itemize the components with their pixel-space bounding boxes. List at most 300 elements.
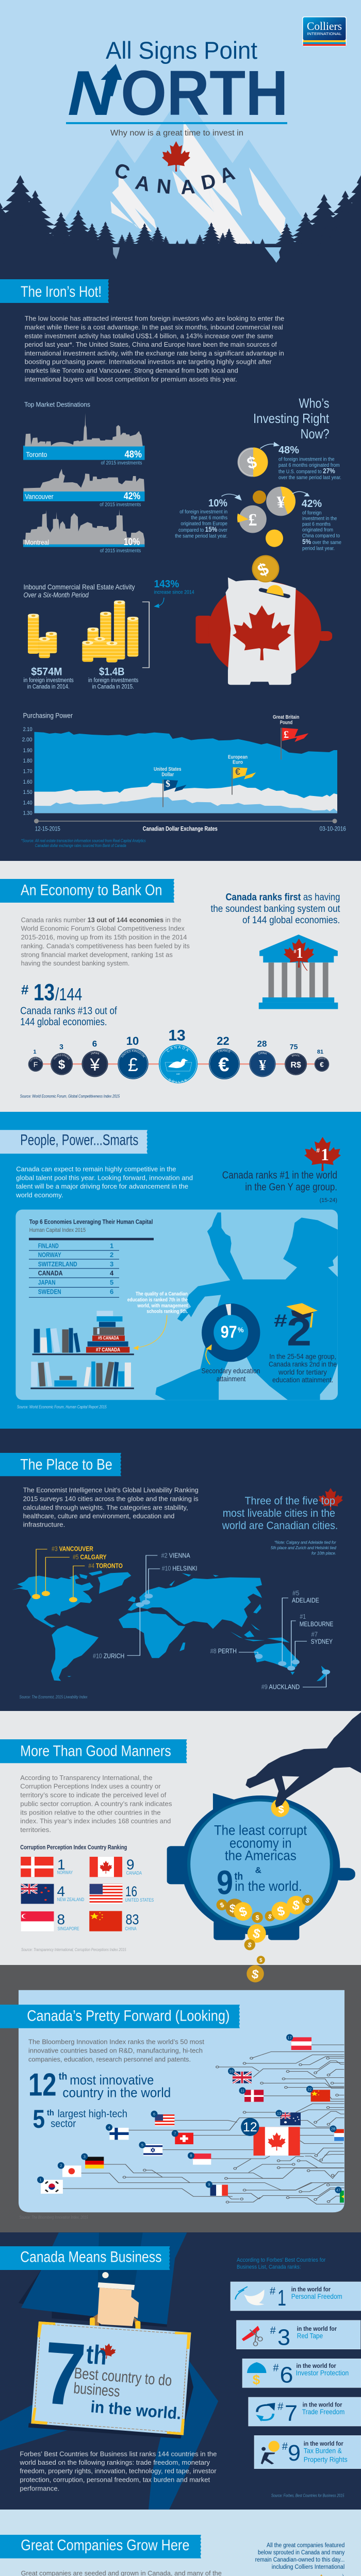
body text: world economy. [15,1191,63,1199]
chart: purchasing power area chart: United States [154,766,182,772]
chart: purchasing power area chart: 1.90 [23,748,32,754]
chart: circuit board of flags [37,2034,344,2204]
stat: 5th largest high-tech sector: th [47,2109,54,2117]
note [271,1540,337,1556]
chart: circuit board of flags: 47 [336,2188,340,2192]
illustration: businessman with briefcase: Best country to do [73,2365,172,2389]
intro text: international investment activity, with the exchange rate being a significant advantage in [25,350,284,357]
callout: Gen Y: (15-24) [320,1197,337,1204]
heading: who's investing [253,396,330,442]
flag grid: corruption ranking: UNITED STATES [125,1897,154,1903]
chart title [29,1218,153,1233]
flag: United Kingdom [233,2072,252,2083]
stat: 12th most innovative: most innovative [70,2072,154,2088]
icon: #1 maple leaf: # [317,1146,320,1154]
heading ribbon: The Place to Be [20,1456,112,1473]
skyline: Toronto: 48% [125,449,142,460]
stat: #13 of 144: Canada ranks #13 out of [20,1005,117,1016]
stat: #2 tertiary education: 2 [287,1309,311,1354]
chart: inbound commercial real estate activity: increase since 2014 [154,589,194,596]
timeline axis: 12-15-2015 [35,825,60,832]
source note: Canadian dollar exchange rates sourced from Bank of Canada [35,843,126,848]
coin: France rank 22 [209,1035,240,1079]
chart: purchasing power area chart: 1.30 [23,810,32,817]
title: CANADA arched: C [111,159,133,184]
chart: top market destinations [23,400,145,554]
chart title: Corruption Perception Index Country Ranking [20,1843,127,1851]
callout: most liveable cities: most liveable cities in the [223,1507,335,1519]
chart: purchasing power area chart: Purchasing Power [23,711,73,719]
coin: Greece rank 81: 81 [317,1049,323,1055]
heading ribbon: An Economy to Bank On [21,882,162,899]
chart: circuit board of flags: 10 [229,2069,234,2074]
stat: US 48%: of foreign investment in the [278,456,335,463]
arrows: Europe and China [221,492,309,501]
labels: international cities: SYDNEY [311,1638,333,1646]
body text [28,2038,204,2063]
labels: international cities: #5 [292,1589,299,1597]
intro text: period last year*. The United States, China and Europe have been the main sources of [25,341,277,348]
source note: *Source: All real estate transaction information sourced from Real Capital Analytics [21,839,146,843]
chart: purchasing power area chart: 1.40 [23,800,32,806]
chart: inbound commercial real estate activity: 143% [154,579,179,590]
note: 5th place and Zurich and Helsinki tied [271,1545,336,1550]
callout: quality of education: The quality of a Canadian [136,1291,188,1297]
coins: falling through piggy bank: $ [304,1896,311,1905]
flag grid: corruption ranking: 4 [57,1884,65,1900]
flag: South Korea [41,2180,63,2194]
card: #7 Trade Freedom: 7 [285,2401,298,2426]
body text: world based on the following rankings: trade freedom, monetary [19,2459,210,2466]
text: least corrupt: th [234,1871,243,1882]
body text: The Economist Intelligence Unit’s Global Liveability Ranking [23,1486,199,1494]
stat: #2 tertiary education: world for tertiary [278,1368,327,1376]
card: #1 Personal Freedom: # [270,2285,276,2297]
coin: Japan rank 6 [81,1039,108,1077]
labels: international cities: #7 [311,1630,318,1638]
text: least corrupt: 9 [217,1863,233,1902]
card: #3 Red Tape [236,2320,360,2350]
flag: New Zealand entry [21,1884,54,1904]
intro: according to Forbes: According to Forbes’ Best Countries for [237,2257,326,2263]
icon: Canadian flag piggy bank: $ [255,559,272,581]
source note: Source: Forbes, Best Countries for Business 2015 [271,2494,344,2498]
coin: China rank 28 [250,1039,275,1077]
card: #1 Personal Freedom: 1 [277,2285,286,2311]
chart: circuit board of flags: 12 [243,2120,257,2134]
body text: global talent pool this year. Looking forward, innovation and [16,1174,193,1181]
illustration: mountains and forest [0,93,361,263]
chart: inbound commercial real estate activity: $574M [31,666,62,678]
chart: purchasing power area chart: 2.10 [23,726,32,733]
flag: Canada entry [90,1857,122,1877]
chart: purchasing power area chart: 1.80 [23,758,32,764]
callout: Gen Y: in the Gen Y age group. [245,1182,337,1193]
callout: most liveable cities: Three of the five top [244,1495,335,1507]
stat: 12th most innovative: 12 [28,2067,57,2103]
card: #1 Personal Freedom [231,2282,361,2311]
stat: US 48%: over the same period last year. [278,474,341,481]
coin: Canada rank 13: DOLLAR [169,1078,187,1083]
icon: maple leaf [162,141,190,172]
body text: Canada ranks number 13 out of 144 economies in the [21,916,182,924]
coin: France rank 22: 22 [217,1035,229,1047]
stat: 12th most innovative: country in the world [62,2085,171,2100]
intro text: international buyers will boost competition for premium assets this year. [25,376,237,383]
heading ribbon: People, Power...Smarts [20,1132,138,1149]
coins: falling through piggy bank: $ [247,1941,253,1949]
chart: inbound commercial real estate activity: in Canada in 2015. [92,684,134,690]
heading ribbon [0,279,109,303]
stat: #2 tertiary education: Canada ranks 2nd in the [269,1360,337,1368]
card: #9 Tax Burden and Property Rights: # [282,2441,288,2452]
flag: Canada [253,2127,300,2156]
source note: Source: World Economic Forum, Global Competitiveness Index 2015 [20,1094,120,1099]
intro text [25,315,284,383]
chart: circuit board of flags: 2 [60,2163,62,2168]
illustration: bookshelves: #7 CANADA [96,1347,120,1353]
callout: quality of education: world, with management [137,1302,188,1309]
panel: People, Power...Smarts [0,1130,341,1410]
panel: More Than Good Manners [0,1712,361,1982]
table: ranking: NORWAY [38,1251,61,1259]
table: ranking: SWEDEN [38,1288,61,1296]
timeline axis [34,819,346,832]
labels: international cities: #9 AUCKLAND [261,1683,300,1691]
icon: man carrying coin [261,2441,280,2464]
flag grid: corruption ranking: 16 [125,1884,137,1900]
labels: international cities: #1 [300,1613,306,1620]
coin: Brazil rank 75: R$ [290,1061,301,1070]
icon: cycle arrows [256,2403,275,2421]
flag: Singapore [193,2154,211,2165]
callout: soundest banking system: Canada ranks first as having [226,892,340,903]
body text: innovative countries based on R&D, manufacturing, hi-tech [28,2047,203,2055]
icon: dollar coin 48%: $ [245,452,259,473]
callout: Canadian-owned companies: remain Canadian-owned to this day... [255,2557,344,2563]
note: *Note: Calgary and Adelaide tied for [274,1540,337,1545]
coin: Japan rank 6: 6 [92,1039,97,1049]
coins: falling through piggy bank: $ [275,1904,286,1919]
skyline: Toronto: Toronto [26,450,47,459]
stat: 5th largest high-tech sector [32,2105,127,2133]
stat: #13 of 144: 144 global economies. [20,1016,107,1028]
callout: soundest banking system: the soundest banking system out [210,904,340,914]
body text: talent will be a major driving force for advancement in the [16,1182,188,1190]
coin: Brazil rank 75: BRAZIL [292,1054,300,1057]
card: #6 Investor Protection: # [273,2363,279,2374]
body text: infrastructure. [23,1521,65,1529]
stat: Europe 10%: originated from Europe [180,520,227,527]
body text: freedom, property rights, innovation, technology, red tape, investor [20,2467,217,2475]
flag: Denmark [244,2090,264,2102]
card: #7 Trade Freedom: Trade Freedom [302,2408,344,2416]
stat: Europe 10% [175,498,227,539]
chart: circuit board of flags: 17 [287,2035,292,2040]
chart: donut 97% secondary education: 97 [221,1323,237,1342]
title: NORTH: N [61,58,123,129]
source note: Source: Transparency International, Corruption Perceptions Index 2015 [21,1947,126,1952]
table: ranking: 2 [110,1251,113,1259]
chart: purchasing power area chart: 1.70 [23,769,32,775]
illustration: reaching figure silhouette [155,1212,338,1400]
divider rule [66,122,287,124]
table: ranking: 6 [110,1288,113,1296]
icon: bank with #1 leaf [259,935,338,1009]
chart: inbound commercial real estate activity [24,579,194,690]
labels: international cities: #2 VIENNA [161,1552,190,1560]
body text [15,1165,193,1199]
table: ranking [29,1238,154,1298]
heading ribbon: The Iron’s Hot! [21,283,102,300]
callout: soundest banking system: of 144 global economies. [242,915,340,926]
heading ribbon: Great Companies Grow Here [21,2537,189,2554]
card: #6 Investor Protection: 6 [280,2362,293,2387]
body text: territory’s score to indicate the perceived level of [20,1791,167,1799]
labels: Canadian cities [52,1545,123,1569]
logo: Colliers International: Colliers [307,20,342,32]
stat: #13 of 144: 13 [34,979,55,1006]
card: #6 Investor Protection [242,2359,361,2387]
coin: United States rank 3: 3 [59,1043,63,1051]
table: ranking: 5 [110,1279,113,1286]
coin: United States rank 3 [51,1043,73,1075]
skyline: Toronto: of 2015 investments [101,461,142,466]
flag: Great Britain Pound [281,728,308,759]
card: #7 Trade Freedom: in the world for [303,2402,342,2408]
title: CANADA arched: A [217,162,238,188]
flag: Netherlands [334,2129,344,2141]
body text: According to Transparency International, the [20,1774,153,1782]
source note: Source: The Bloomberg Innovation Index, 2015 [20,2215,88,2220]
icon: #1 maple leaf: 1 [321,1145,329,1164]
chart: inbound commercial real estate activity: in foreign investments [88,677,139,684]
skyline: Vancouver: 42% [124,491,140,502]
stat: US 48%: the U.S. compared to 27% [278,467,335,475]
chart: purchasing power area chart: 1.50 [23,789,32,795]
title: CANADA arched: A [133,172,152,196]
intro: according to Forbes: Business List, Canada ranks: [237,2264,301,2270]
flag: Brazil [340,2191,344,2202]
coins: falling through piggy bank [217,1895,313,1982]
icon: umbrella and dollar [247,2362,266,2373]
panel: The Iron's Hot [0,279,346,848]
intro: according to Forbes [237,2257,326,2270]
stat: Europe 10%: of foreign investment in [179,509,227,515]
labels: Canadian cities: #3 VANCOUVER [52,1545,93,1553]
intro text: markets like Toronto and Vancouver. Strong demand from both local and [25,367,238,375]
stat: #13 of 144: /144 [55,985,82,1005]
heading ribbon: Canada Means Business [20,2249,161,2266]
flag: Norway entry [21,1857,54,1877]
title: NORTH: ORTH [121,58,288,129]
card: #9 Tax Burden and Property Rights [254,2435,361,2469]
coins: falling through piggy bank: $ [255,1913,259,1922]
text: least corrupt: The least corrupt [214,1823,307,1838]
chart: inbound commercial real estate activity: Inbound Commercial Real Estate Activity [24,583,135,591]
coin: entering slot: $ [278,1804,284,1816]
stat: #2 tertiary education: In the 25-54 age group, [269,1352,336,1361]
callout: soundest banking system [210,892,340,926]
coin: Japan rank 6: JAPAN [91,1052,99,1055]
card: #9 Tax Burden and Property Rights: Property Rights [304,2455,348,2463]
body text [23,1486,199,1529]
coins: falling through piggy bank: $ [267,1912,273,1921]
stat: China 42%: period last year. [302,545,335,551]
arrow: US [260,442,280,449]
card: #6 Investor Protection: Investor Protection [296,2369,349,2377]
coin: United States rank 3: UNITED STATES [54,1054,70,1059]
illustration: hand dropping coin [245,1712,361,1807]
flag grid: corruption ranking: 9 [126,1856,135,1872]
card: #1 Personal Freedom: Personal Freedom [291,2292,342,2300]
intro text: estate investment activity has totalled US$1.4 billion, a 143% increase over the same [25,332,273,340]
source note: Source: The Economist, 2015 Liveability Index [20,1695,88,1700]
rank badges [37,2034,342,2193]
chart: circuit board of flags: 8 [190,2154,192,2158]
coin: Greece rank 81: GREECE [318,1058,326,1060]
labels: international cities: MELBOURNE [300,1620,334,1628]
skyline: Montreal: of 2015 investments [100,548,141,554]
chart: donut 97% secondary education: Secondary education [202,1367,260,1375]
flag: France [210,2185,228,2196]
chart: circuit board of flags: 3 [84,2155,86,2159]
flag grid: corruption ranking: NEW ZEALAND [57,1897,85,1903]
intro text: The low loonie has attracted interest from foreign investors who are looking to enter the [25,315,284,323]
chart: donut 97% secondary education [202,1303,260,1383]
stat: China 42% [302,498,341,551]
chart: inbound commercial real estate activity: Over a Six-Month Period [24,591,89,599]
card: #9 Tax Burden and Property Rights: 9 [288,2441,301,2466]
chart title: Human Capital Index 2015 [29,1227,86,1233]
body text: Canada can expect to remain highly competitive in the [16,1165,176,1173]
icon: bank with #1 leaf: # [294,949,296,955]
illustration: businessman with briefcase: th [85,2340,108,2371]
flag: United States [155,2114,174,2126]
stat: US 48%: 48% [278,445,299,456]
timeline axis: Canadian Dollar Exchange Rates [143,825,218,832]
body text: 2015-2016, moving up from its 15th position in the 2014 [21,934,187,941]
panel: The Place to Be [0,1453,343,1700]
flag: Switzerland [175,2133,193,2144]
coin: Switzerland rank 1: F [34,1060,38,1069]
labels: international cities: #8 PERTH [210,1647,237,1655]
icon: wheat stalks and arrow [288,2573,347,2576]
body text: healthcare, culture and environment, education and [23,1512,174,1520]
flag grid: corruption ranking: CHINA [125,1926,137,1932]
labels: international cities: #10 ZURICH [93,1652,124,1659]
coin: Greece rank 81: € [320,1060,324,1069]
labels: Canadian cities: #5 CALGARY [73,1553,107,1561]
icon: dove [235,2286,265,2306]
title: CANADA arched [111,159,238,199]
stat: 5th largest high-tech sector: sector [51,2118,76,2129]
icon: coin stacks [28,598,164,668]
panel: human capital [15,1210,338,1400]
callout: Canadian-owned companies: below sprouted in Canada and many [258,2550,345,2556]
stat: #13 of 144 [20,979,117,1028]
text: least corrupt: & [255,1866,261,1875]
title: All Signs Point: All Signs Point [106,37,257,64]
card: #7 Trade Freedom [249,2397,361,2426]
icon: falling coins [237,487,296,547]
panel: Canada's Pretty Forward [0,1990,344,2220]
body text: index. This year’s index includes 168 countries and [20,1817,171,1825]
stat: China 42%: of foreign [302,510,322,516]
callout: most liveable cities [222,1488,343,1532]
labels: international cities: #10 HELSINKI [162,1565,197,1572]
chart: ranking coins timeline [28,1027,329,1083]
chart: inbound commercial real estate activity: in Canada in 2014. [27,684,70,690]
text: least corrupt: in the world. [235,1878,302,1894]
chart: circuit board of flags: 22 [307,2087,312,2092]
heading ribbon: Canada’s Pretty Forward (Looking) [27,2007,229,2024]
coin: Canada rank 13: 1987 [176,1073,180,1075]
flag: Japan [62,2165,81,2177]
heading: who's investing: Investing Right [253,411,330,426]
callout: quality of education: schools ranking 5th. [146,1308,188,1314]
stat: China 42%: 42% [302,498,322,510]
heading ribbon [0,2005,240,2028]
coin: United Kingdom rank 10: UNITED KINGDOM [121,1050,145,1058]
coin: United Kingdom rank 10: 10 [126,1035,139,1047]
coin: Switzerland rank 1: 1 [33,1049,36,1055]
body text: protection, corruption, personal freedom, tax burden and market [20,2476,210,2484]
card: #7 Trade Freedom: # [277,2401,284,2412]
heading ribbon [0,2246,170,2270]
skyline: Montreal: Montreal [25,538,49,547]
heading ribbon [0,879,174,903]
flag: Austria [291,2037,311,2050]
icon: north arrow [101,64,122,96]
source note [21,839,146,848]
skyline: Montreal [23,509,145,554]
intro text: market while there is a cost advantage. In the past six months, inbound commercial real [25,324,283,331]
note: for 10th place. [311,1551,336,1556]
coins: falling through piggy bank: $ [237,1904,249,1920]
flag grid: corruption ranking: 8 [57,1911,65,1927]
coin: Canada rank 13: 13 [168,1027,186,1044]
flag: China entry [89,1911,122,1931]
callout: most liveable cities: world are Canadian cities. [222,1520,338,1532]
skyline: Montreal: 10% [124,537,140,548]
coin: Canada rank 13 [159,1027,198,1083]
card: #6 Investor Protection: $ [253,2372,260,2387]
timeline axis: 03-10-2016 [320,825,346,832]
panel: hero [0,16,361,263]
chart: purchasing power area chart: 1.60 [23,779,32,785]
title: CANADA arched: A [180,176,196,199]
chart: circuit board of flags: 13 [277,2111,281,2115]
flag grid: corruption ranking [21,1856,154,1932]
flag grid: corruption ranking: NORWAY [57,1870,73,1875]
flag: Singapore entry [21,1911,54,1931]
callout: Canadian-owned companies: including Colliers International [272,2564,344,2570]
card: #3 Red Tape: Red Tape [297,2332,323,2340]
body text: companies, education, research personnel and patents. [28,2055,191,2063]
coin: China rank 28: CHINA [258,1052,266,1055]
callout: Gen Y [222,1170,337,1204]
illustration: businessman with briefcase: business [73,2380,121,2400]
source note: Source: World Economic Forum, Human Capital Report 2015 [17,1405,107,1410]
icon: graduation cap [286,1303,318,1328]
coin: entering slot [271,1799,289,1817]
illustration: bookshelves [30,1311,134,1389]
coin: United Kingdom rank 10: £ [128,1054,138,1075]
callout: quality of education: education is ranked 7th in the [127,1297,188,1303]
flag: United States entry [90,1884,122,1904]
title: CANADA arched: D [199,170,218,194]
